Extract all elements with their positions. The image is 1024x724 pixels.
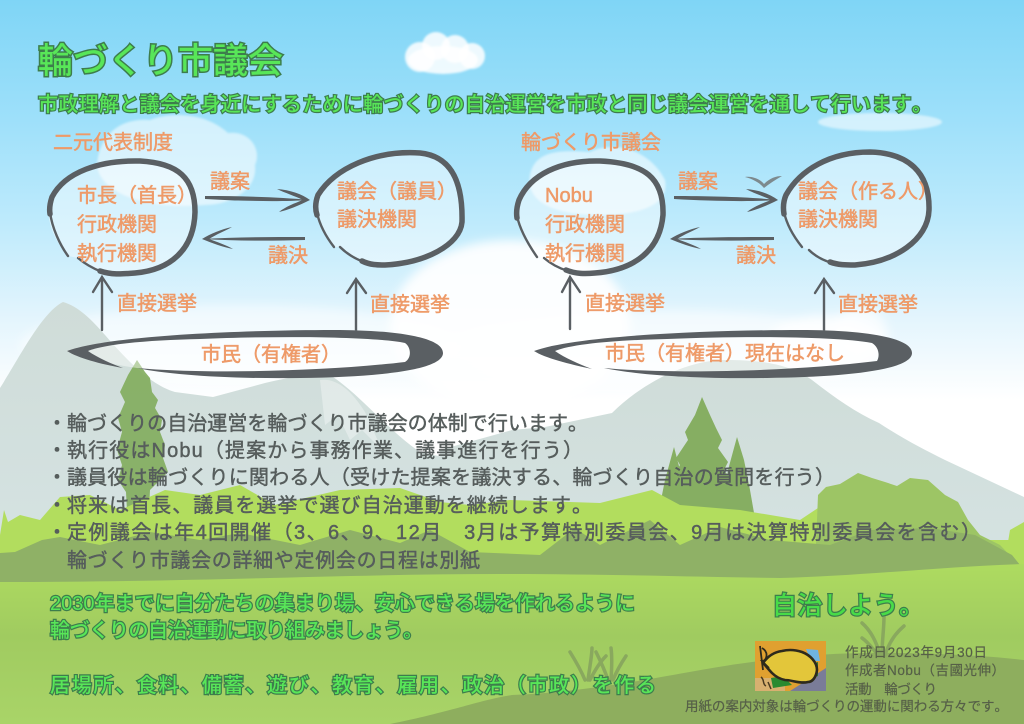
- green message: 2030年までに自分たちの集まり場、安心できる場を作れるように: [50, 592, 635, 615]
- green message: [50, 592, 656, 697]
- bullet list: 議員役は輪づくりに関わる人（受けた提案を議決する、輪づくり自治の質問を行う）: [67, 466, 835, 489]
- bullet list: 執行役はNobu（提案から事務作業、議事進行を行う）: [67, 439, 583, 462]
- arrow: left direct election: 直接選挙: [117, 292, 197, 315]
- circle: mayor: [49, 161, 197, 274]
- circle: Nobu: Nobu: [545, 185, 593, 207]
- creator info: 作成日2023年9月30日: [845, 645, 987, 660]
- arrow: right direct election: [815, 279, 918, 331]
- arrow: 議案: 議案: [678, 170, 718, 193]
- right diagram heading: 輪づくり市議会: [521, 131, 661, 154]
- bullet list: [47, 412, 981, 572]
- green message: 輪づくりの自治運動に取り組みましょう。: [50, 619, 423, 642]
- bullet list: ・: [47, 440, 67, 462]
- arrow: right direct election: [347, 279, 450, 331]
- arrow: right direct election: 直接選挙: [838, 293, 918, 316]
- circle: Nobu: 執行機関: [545, 242, 625, 265]
- left diagram: 二元代表制度: [49, 131, 462, 378]
- ellipse: citizens: 市民（有権者）現在はなし: [605, 342, 845, 365]
- circle: mayor: 市長（首長）: [77, 184, 197, 207]
- foreground hill: [390, 653, 1024, 724]
- circle: Nobu: [517, 161, 663, 274]
- bullet list: ・: [47, 413, 67, 435]
- arrow: 議案: [674, 170, 778, 212]
- arrow: left direct election: 直接選挙: [585, 292, 665, 315]
- circle: council of makers: [783, 152, 938, 265]
- arrow: 議決: [670, 227, 776, 267]
- arrow: 議決: 議決: [268, 244, 308, 267]
- dark tree belt: [0, 520, 1024, 585]
- grass field: [0, 564, 1024, 724]
- bullet list: 将来は首長、議員を選挙で選び自治運動を継続します。: [67, 494, 592, 517]
- logo image: [755, 641, 826, 691]
- creator info: [685, 645, 1008, 714]
- bullet list: ・: [47, 495, 67, 517]
- arrow: left direct election: [562, 277, 665, 329]
- creator info: 活動 輪づくり: [845, 682, 937, 697]
- bullet list: 輪づくり市議会の詳細や定例会の日程は別紙: [67, 549, 480, 572]
- arrow: left direct election: [93, 277, 197, 330]
- arrow: 議決: 議決: [736, 244, 776, 267]
- bullet list: ・: [47, 467, 67, 489]
- circle: mayor: 執行機関: [77, 242, 157, 265]
- arrow: 議案: 議案: [210, 170, 250, 193]
- light bushes: [0, 485, 1024, 575]
- arrow: 議案: [205, 170, 310, 212]
- centre trees: [655, 397, 757, 535]
- grass tufts: [570, 616, 904, 680]
- icon: bird: [745, 176, 782, 188]
- ellipse: citizens: 市民（有権者）: [201, 343, 341, 366]
- circle: council of makers: 議決機関: [798, 208, 878, 231]
- creator info: 用紙の案内対象は輪づくりの運動に関わる方々です。: [685, 699, 1008, 714]
- ellipse: citizens: [67, 330, 443, 378]
- bullet list: 輪づくりの自治運営を輪づくり市議会の体制で行います。: [67, 412, 588, 435]
- circle: council of makers: 議会（作る人）: [798, 180, 938, 203]
- bullet list: 定例議会は年4回開催（3、6、9、12月 3月は予算特別委員会、9月は決算特別委員会を含む）: [67, 521, 981, 544]
- arrow: 議決: [202, 227, 308, 267]
- bullet list: ・: [47, 522, 67, 544]
- left diagram heading: 二元代表制度: [53, 131, 173, 154]
- slogan: 自治しよう。: [772, 592, 924, 620]
- title: 輪づくり市議会: [38, 42, 283, 81]
- circle: council: [316, 153, 462, 265]
- green message: 居場所、食料、備蓄、遊び、教育、雇用、政治（市政）を作る: [50, 674, 656, 697]
- circle: council: 議決機関: [337, 208, 417, 231]
- subtitle: 市政理解と議会を身近にするために輪づくりの自治運営を市政と同じ議会運営を通して行います。: [38, 93, 932, 116]
- circle: mayor: 行政機関: [77, 213, 157, 236]
- creator info: 作成者Nobu（吉國光伸）: [845, 663, 1005, 678]
- right diagram: 輪づくり市議会: [517, 131, 938, 378]
- ellipse: citizens: [534, 330, 912, 378]
- circle: Nobu: 行政機関: [545, 213, 625, 236]
- right bush: [815, 473, 1024, 570]
- circle: council: 議会（議員）: [337, 180, 457, 203]
- left tree: [117, 360, 168, 530]
- arrow: right direct election: 直接選挙: [370, 293, 450, 316]
